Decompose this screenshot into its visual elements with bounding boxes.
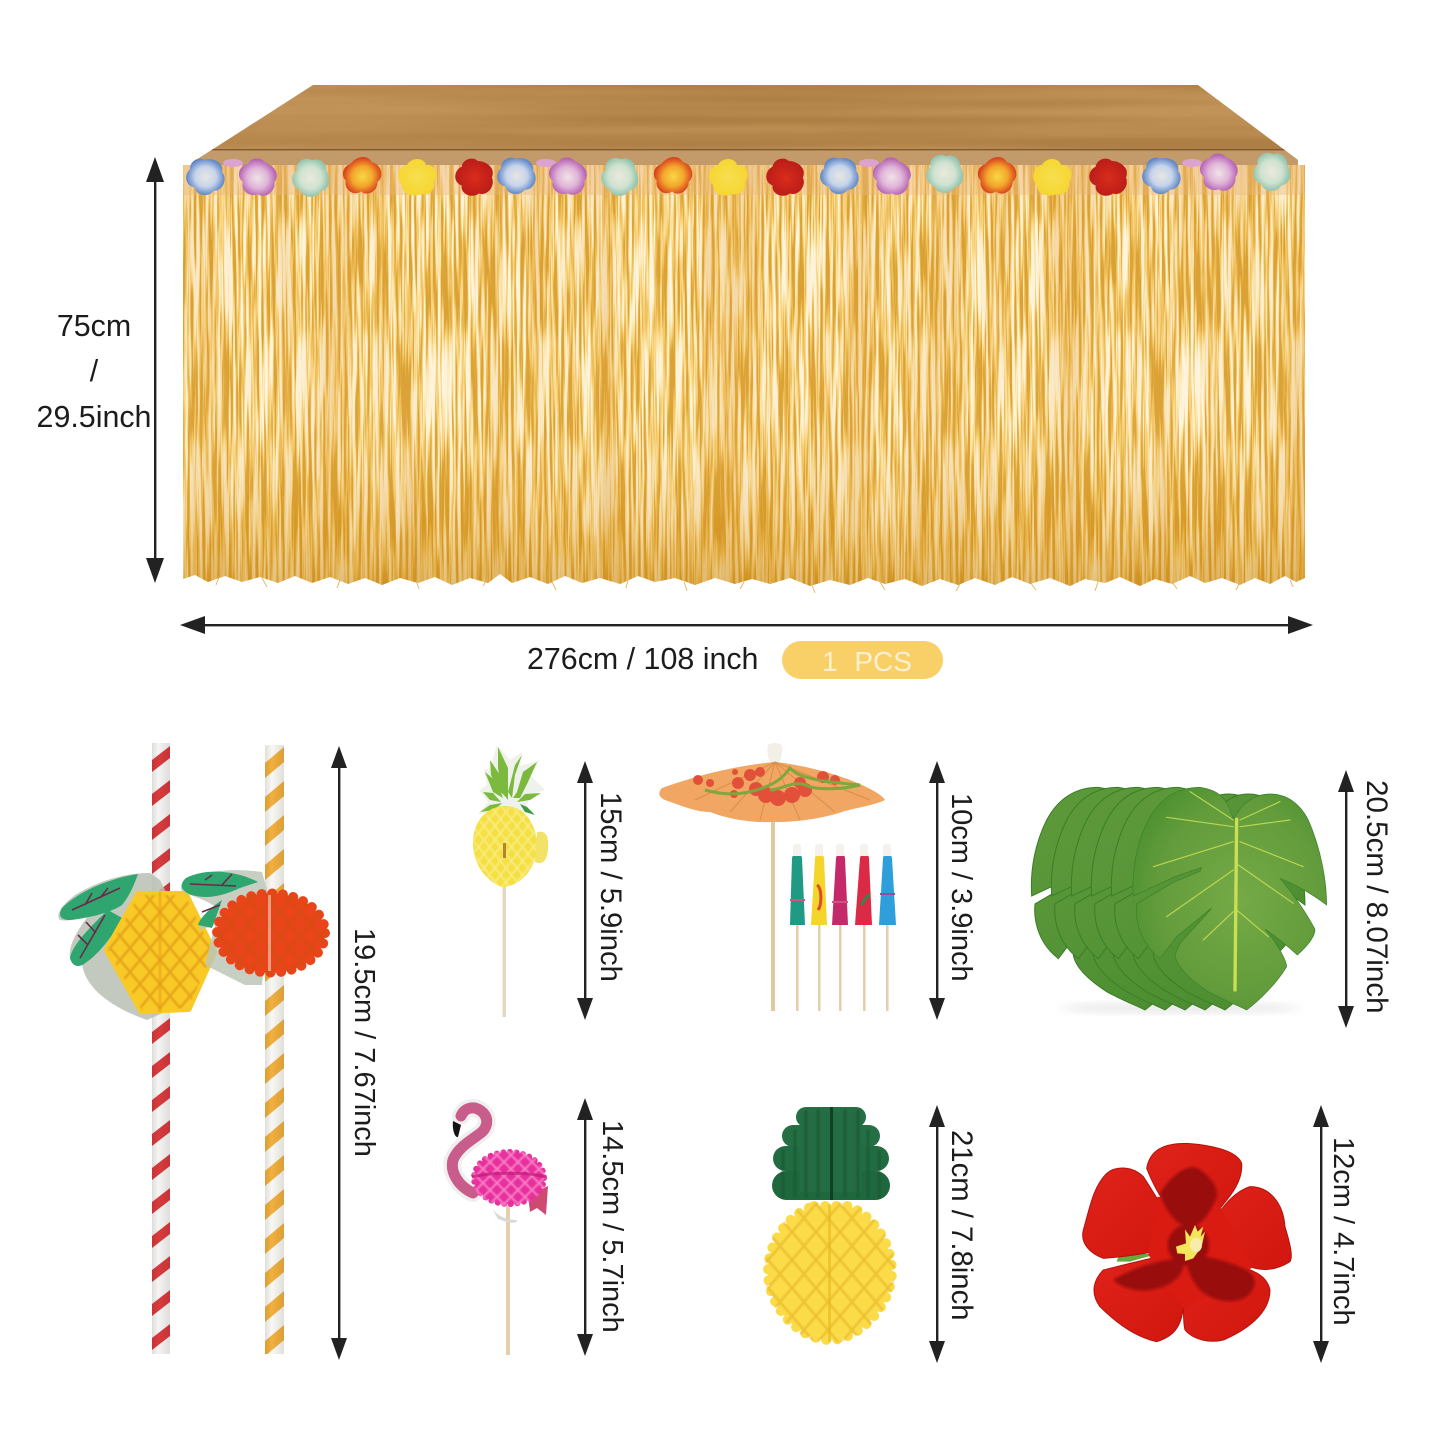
yellow honeycomb fruit <box>108 892 213 1012</box>
flamingo cocktail pick <box>452 1108 548 1355</box>
pick stick <box>502 885 506 1017</box>
label: umbrella height: 10cm / 3.9inch <box>945 793 977 982</box>
arrow: leaf height <box>1338 770 1354 1028</box>
large umbrella stick <box>771 820 775 1011</box>
green sepal <box>1117 1254 1150 1262</box>
honeycomb pineapple <box>765 1107 895 1343</box>
tropical monstera leaves <box>1031 787 1327 1014</box>
arrow: skirt height <box>146 157 164 583</box>
label: straw height: 19.5cm / 7.67inch <box>348 928 380 1157</box>
arrow: skirt width <box>180 616 1313 634</box>
arrow: straw height <box>331 746 347 1360</box>
badge: 1 PCS <box>782 641 943 679</box>
pineapple crown <box>478 745 545 815</box>
leaf midrib and veins <box>1153 792 1303 990</box>
arrow: hibiscus height <box>1313 1105 1329 1363</box>
small closed umbrella: green <box>790 844 805 1011</box>
pineapple yellow honeycomb body <box>765 1203 895 1343</box>
flower garland <box>184 147 1293 205</box>
arrow: flamingo height <box>577 1098 593 1356</box>
flamingo beak <box>453 1121 461 1137</box>
flamingo leg card <box>490 1205 517 1223</box>
table skirt with wood table top <box>183 85 1305 593</box>
table top wood surface <box>190 85 1305 166</box>
small closed umbrella: blue <box>879 844 896 1011</box>
loose fringe hairs <box>216 575 1293 593</box>
label: skirt height: 75cm <box>57 309 131 343</box>
hibiscus dark throat <box>1113 1167 1255 1301</box>
large umbrella canopy <box>659 762 885 822</box>
fruit leaves <box>58 873 200 1020</box>
small closed umbrella: yellow <box>811 844 827 1011</box>
label: hibiscus height: 12cm / 4.7inch <box>1327 1137 1359 1326</box>
flamingo tail <box>528 1186 548 1215</box>
arrow: umbrella height <box>929 761 945 1020</box>
label: honeycomb pineapple height: 21cm / 7.8inch <box>945 1130 978 1321</box>
small closed umbrella: red <box>855 844 872 1011</box>
label: pineapple pick height: 15cm / 5.9inch <box>594 792 626 982</box>
label: flamingo height: 14.5cm / 5.7inch <box>596 1120 628 1333</box>
cocktail umbrellas <box>659 743 896 1011</box>
arrow: honeycomb pineapple height <box>929 1105 945 1363</box>
flamingo pick stick <box>506 1205 510 1355</box>
front leaf <box>1133 787 1327 1010</box>
label: skirt height: / <box>90 354 99 388</box>
red striped straw <box>152 743 170 1354</box>
hibiscus stamen <box>1176 1225 1205 1261</box>
hibiscus petal base filling gaps <box>1148 1197 1253 1310</box>
stacked back leaves <box>1031 787 1305 1010</box>
arrow: pineapple pick height <box>577 761 593 1020</box>
hibiscus petals <box>1083 1143 1291 1342</box>
leaf shadow <box>1060 1002 1300 1014</box>
label: leaf height: 20.5cm / 8.07inch <box>1360 780 1393 1014</box>
small closed umbrella: magenta <box>832 844 848 1011</box>
pink petals behind garland <box>223 159 1202 167</box>
red hibiscus flower <box>1083 1143 1291 1342</box>
straw: orange striped with red honeycomb fruit <box>181 745 327 1354</box>
pineapple honeycomb body <box>473 806 548 887</box>
large umbrella knob <box>767 743 782 765</box>
canopy flower print <box>693 767 840 806</box>
pineapple cocktail pick <box>473 745 548 1017</box>
flamingo neck <box>452 1108 487 1193</box>
flamingo honeycomb body <box>472 1150 546 1206</box>
label: skirt height: 29.5inch <box>37 400 151 434</box>
orange striped straw <box>265 745 284 1354</box>
label: skirt height <box>37 309 151 434</box>
badge: 1 PCS: 1 PCS <box>822 646 912 677</box>
label: skirt width: 276cm / 108 inch <box>527 642 758 676</box>
red honeycomb fruit <box>215 892 327 974</box>
fruit leaves <box>181 870 270 985</box>
grass fringe skirt <box>183 163 1305 587</box>
straw: red striped with yellow honeycomb fruit <box>58 743 213 1354</box>
pineapple green crown <box>772 1107 890 1200</box>
